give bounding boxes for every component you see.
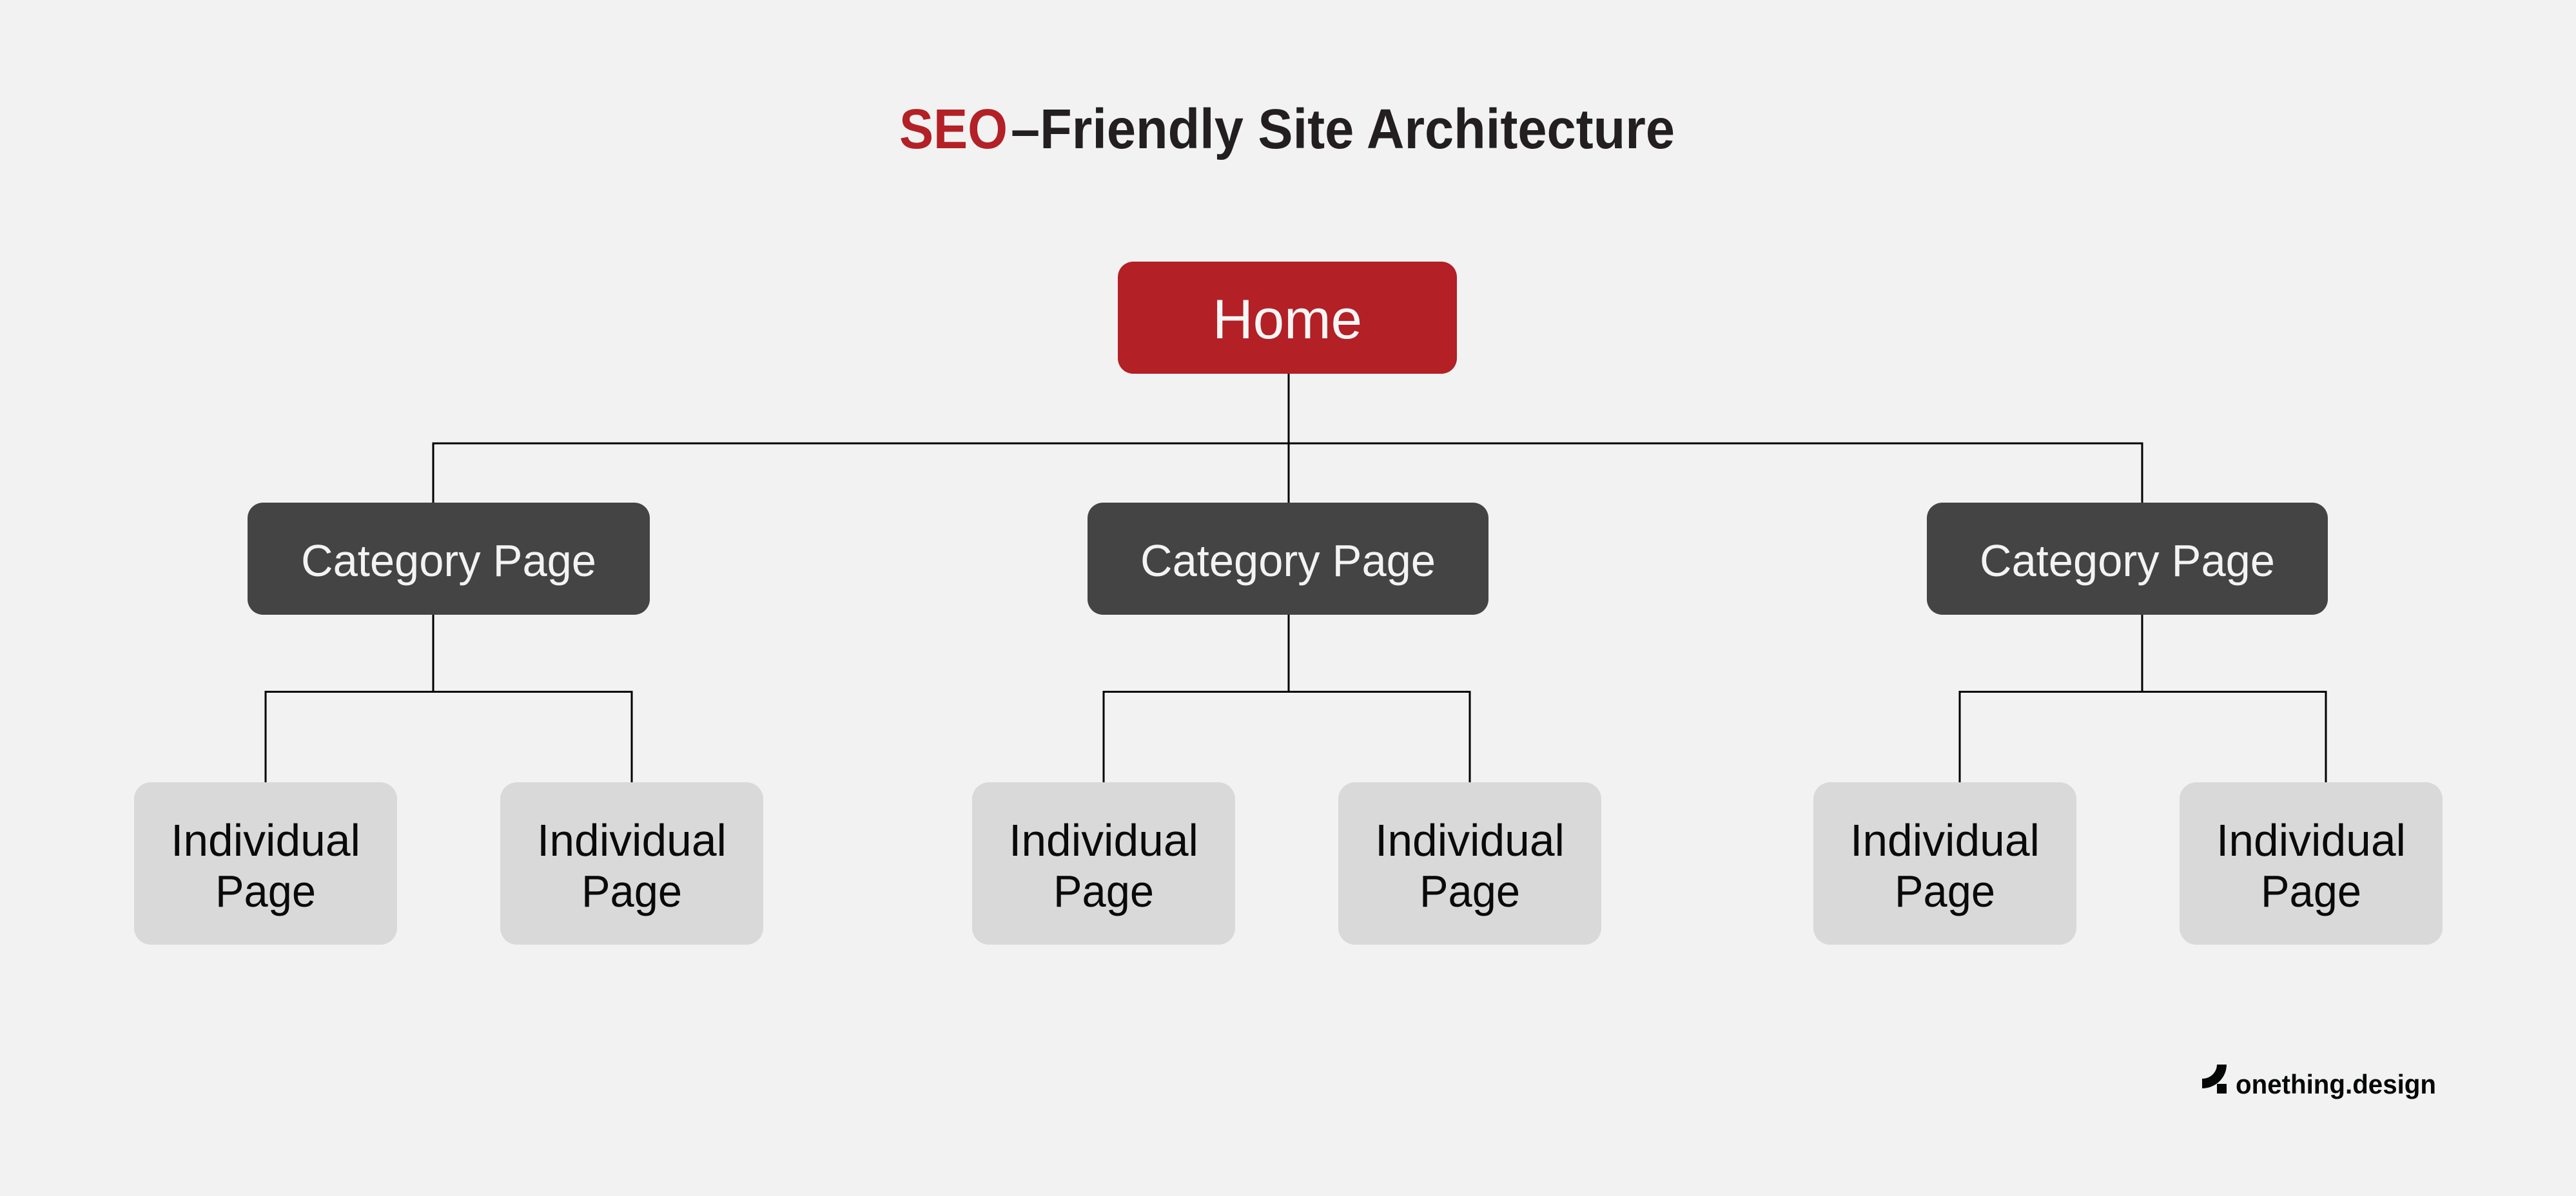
individual page 3 xyxy=(972,782,1235,945)
category node 1: Category Page xyxy=(301,535,596,586)
logo: onething.design: onething.design xyxy=(2236,1069,2436,1099)
title: SEO xyxy=(899,98,1008,160)
connectors: home to categories xyxy=(433,374,2142,503)
individual page 4: Page xyxy=(1420,866,1520,916)
home node xyxy=(1118,262,1457,374)
individual page 4 xyxy=(1338,782,1601,945)
individual page 6: Individual xyxy=(2216,815,2406,865)
title: –Friendly Site Architecture xyxy=(1011,98,1675,160)
individual page 5: Individual xyxy=(1850,815,2040,865)
category node 1 xyxy=(248,503,650,615)
connectors: category 2 to pages xyxy=(1104,615,1470,782)
home node: Home xyxy=(1213,289,1362,351)
individual page 5: Page xyxy=(1895,866,1995,916)
individual page 3: Page xyxy=(1053,866,1154,916)
category node 2: Category Page xyxy=(1140,535,1436,586)
individual page 5 xyxy=(1813,782,2076,945)
individual page 2: Page xyxy=(581,866,682,916)
category node 3: Category Page xyxy=(1980,535,2275,586)
connectors: category 1 to pages xyxy=(266,615,632,782)
individual page 2: Individual xyxy=(537,815,727,865)
individual page 1: Individual xyxy=(171,815,360,865)
individual page 4: Individual xyxy=(1375,815,1565,865)
individual page 6: Page xyxy=(2261,866,2361,916)
individual page 2 xyxy=(500,782,763,945)
individual page 6 xyxy=(2180,782,2443,945)
category node 3 xyxy=(1927,503,2328,615)
individual page 1: Page xyxy=(215,866,316,916)
individual page 1 xyxy=(134,782,397,945)
individual page 3: Individual xyxy=(1009,815,1198,865)
category node 2 xyxy=(1088,503,1488,615)
connectors: category 3 to pages xyxy=(1960,615,2326,782)
